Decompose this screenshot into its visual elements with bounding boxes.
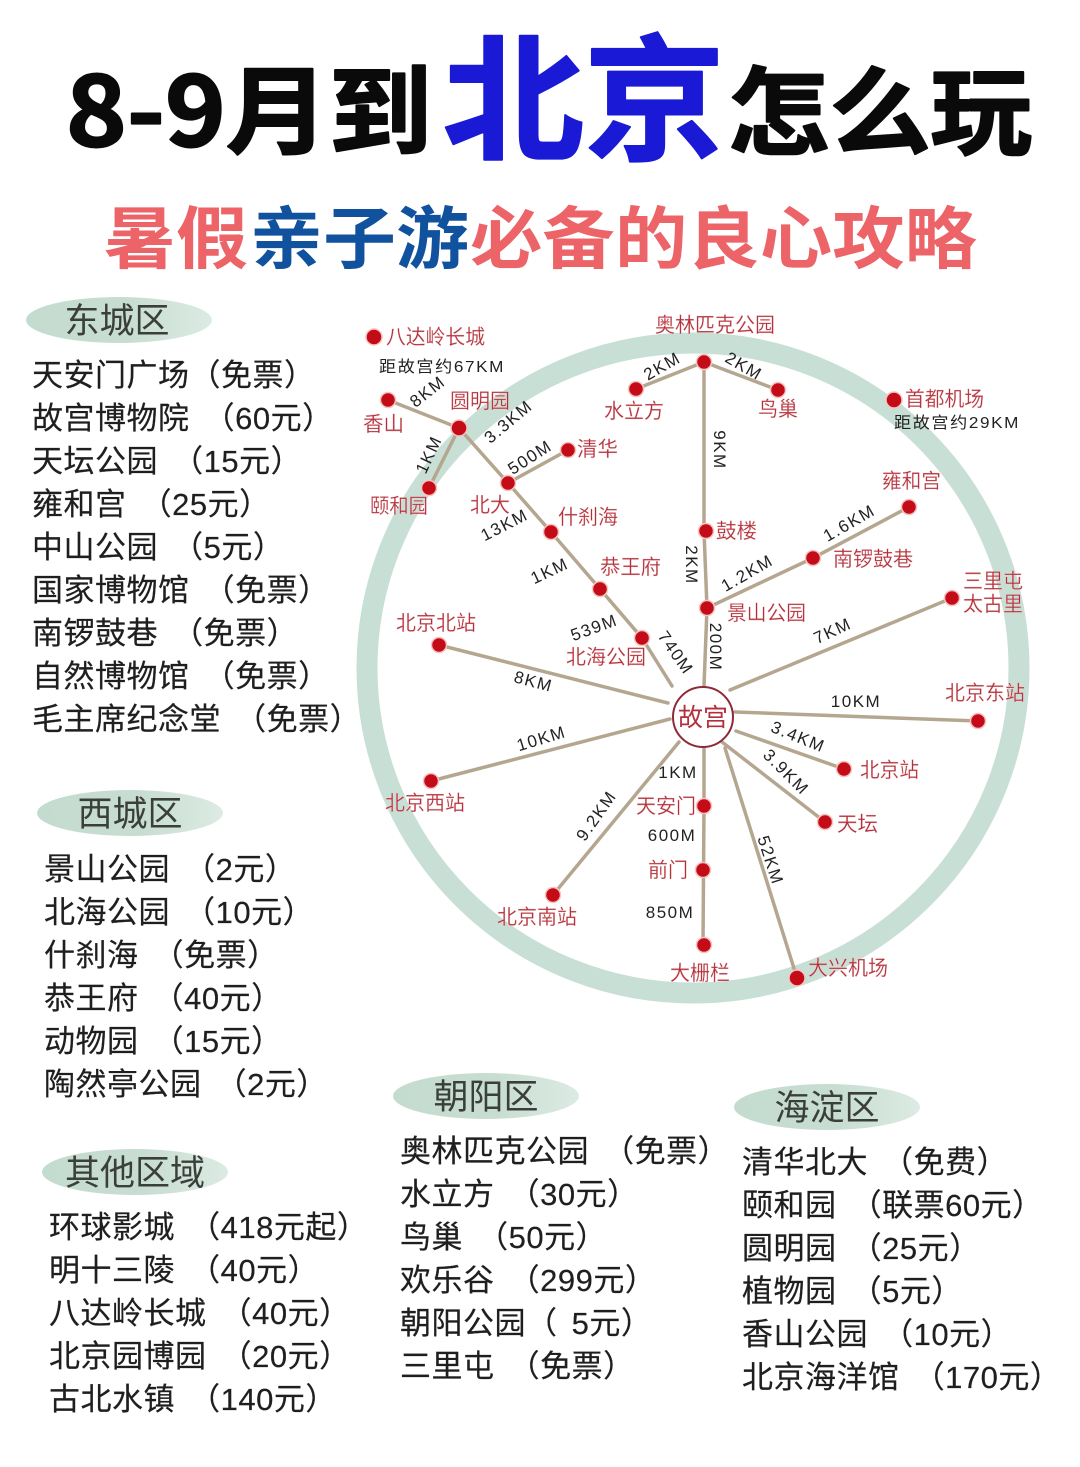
distance labels: 600M: [648, 826, 696, 845]
heading: 其他区域: [42, 1149, 228, 1195]
panel: 朝阳区: [393, 1073, 729, 1384]
node: 北京南站: 北京南站: [497, 906, 577, 929]
heading: 其他区域: 其他区域: [65, 1154, 205, 1193]
list: 朝阳区 attractions: 奥林匹克公园 （免票）: [400, 1134, 729, 1169]
list: 东城区 attractions: 南锣鼓巷 （免票）: [32, 616, 298, 651]
list: 海淀区 attractions: [742, 1145, 1061, 1395]
node: 首都机场: 距故宫约29KM: [894, 414, 1020, 432]
title: 8-9月到: [66, 35, 432, 174]
distance labels: 7KM: [811, 614, 855, 648]
node: 景山公园: 景山公园: [727, 602, 806, 625]
heading: 西城区: 西城区: [77, 795, 183, 834]
heading: 海淀区: [734, 1084, 920, 1130]
list: 朝阳区 attractions: [400, 1134, 729, 1384]
distance labels: 9KM: [710, 430, 729, 470]
subtitle: 暑假: [104, 184, 248, 283]
list: 东城区 attractions: 天安门广场（免票）: [32, 358, 316, 393]
heading: 东城区: 东城区: [64, 302, 170, 341]
distance labels: 2KM: [682, 545, 701, 585]
panel: 其他区域: [42, 1149, 368, 1417]
node: 大兴机场: [789, 957, 888, 986]
node: 北京东站: 北京东站: [945, 682, 1025, 705]
list: 东城区 attractions: 天坛公园 （15元）: [32, 444, 302, 479]
node: 圆明园: 圆明园: [450, 390, 510, 413]
node: 鸟巢: 鸟巢: [758, 398, 798, 421]
list: 海淀区 attractions: 北京海洋馆 （170元）: [742, 1360, 1061, 1395]
node: 奥林匹克公园: [655, 314, 775, 370]
node: 景山公园: [700, 600, 806, 625]
subtitle: 亲子游: [250, 184, 469, 283]
node: 香山: 香山: [363, 413, 404, 436]
list: 西城区 attractions: 恭王府 （40元）: [44, 981, 283, 1016]
node: 北海公园: 北海公园: [566, 646, 646, 669]
ring: [367, 343, 1019, 993]
node: 北京东站: [945, 682, 1025, 728]
distance labels: 10KM: [515, 722, 568, 755]
subtitle: 必备的良心攻略: [470, 184, 977, 283]
distance labels: 2KM: [640, 348, 684, 384]
node: 恭王府: [592, 556, 661, 596]
panel: 海淀区: [734, 1084, 1061, 1395]
node: 三里屯太古里: 太古里: [963, 593, 1023, 616]
heading: 朝阳区: [393, 1073, 579, 1119]
subtitle: [104, 184, 977, 283]
distance labels: 1.6KM: [820, 501, 879, 546]
node: 北大: [470, 476, 516, 517]
panel: 西城区: [37, 790, 328, 1102]
node: 大栅栏: 大栅栏: [670, 962, 730, 985]
list: 其他区域 attractions: 八达岭长城 （40元）: [49, 1296, 351, 1331]
connecting lines: [388, 362, 978, 978]
node: 雍和宫: [882, 470, 941, 514]
list: 其他区域 attractions: [49, 1210, 368, 1417]
node: 颐和园: 颐和园: [370, 495, 428, 518]
radial map of Beijing attractions around 故宫: [363, 314, 1025, 993]
list: 朝阳区 attractions: 朝阳公园（ 5元）: [400, 1306, 652, 1341]
list: 海淀区 attractions: 植物园 （5元）: [742, 1274, 963, 1309]
list: 其他区域 attractions: 北京园博园 （20元）: [49, 1339, 351, 1374]
node: 雍和宫: 雍和宫: [882, 470, 941, 493]
title: [66, 0, 1032, 189]
list: 西城区 attractions: [44, 852, 328, 1102]
distance labels: 740M: [654, 628, 697, 678]
list: 朝阳区 attractions: 鸟巢 （50元）: [400, 1220, 607, 1255]
node: 什刹海: [544, 506, 618, 540]
distance labels: [406, 348, 881, 922]
list: 东城区 attractions: 国家博物馆 （免票）: [32, 573, 330, 608]
distance labels: 200M: [706, 623, 725, 671]
list: 海淀区 attractions: 圆明园 （25元）: [742, 1231, 981, 1266]
list: 朝阳区 attractions: 三里屯 （免票）: [400, 1349, 635, 1384]
distance labels: 1KM: [528, 554, 572, 588]
distance labels: 3.4KM: [768, 717, 828, 756]
node: 天坛: [818, 813, 878, 836]
node: 香山: [363, 392, 404, 436]
node: 南锣鼓巷: 南锣鼓巷: [833, 548, 913, 571]
list: 东城区 attractions: [32, 358, 361, 737]
list: 其他区域 attractions: 环球影城 （418元起）: [49, 1210, 368, 1245]
node: 三里屯太古里: 三里屯: [963, 570, 1023, 593]
node: 北京南站: [497, 888, 577, 929]
node: 大栅栏: [670, 938, 730, 985]
node: 天坛: 天坛: [837, 813, 878, 836]
heading: 朝阳区: 朝阳区: [433, 1078, 539, 1117]
node: 圆明园: [450, 390, 510, 436]
node: 北京北站: [396, 612, 476, 652]
heading: 东城区: [26, 297, 212, 343]
node: 北京北站: 北京北站: [396, 612, 476, 635]
distance labels: 13KM: [478, 505, 531, 545]
list: 东城区 attractions: 雍和宫 （25元）: [32, 487, 271, 522]
node: 颐和园: [370, 480, 436, 518]
node: 鸟巢: [758, 382, 798, 421]
node: 北京西站: [385, 774, 465, 815]
list: 西城区 attractions: 什刹海 （免票）: [44, 938, 279, 973]
distance labels: 1KM: [412, 433, 446, 477]
list: 西城区 attractions: 动物园 （15元）: [44, 1024, 283, 1059]
node: 北大: 北大: [470, 494, 510, 517]
list: 西城区 attractions: 陶然亭公园 （2元）: [44, 1067, 328, 1102]
distance labels: 539M: [568, 611, 620, 645]
node: 大兴机场: 大兴机场: [808, 957, 888, 980]
node: 鼓楼: 鼓楼: [716, 520, 757, 543]
node: 清华: 清华: [577, 438, 618, 461]
list: 东城区 attractions: 自然博物馆 （免票）: [32, 659, 330, 694]
distance labels: 3.9KM: [759, 745, 813, 799]
node: 水立方: [604, 382, 664, 423]
node: 北海公园: [566, 630, 650, 669]
distance labels: 8KM: [512, 667, 555, 696]
heading: 西城区: [37, 790, 223, 836]
center: 故宫: 故宫: [678, 704, 728, 732]
node: 恭王府: 恭王府: [600, 556, 661, 579]
node: 八达岭长城: 八达岭长城: [386, 326, 485, 349]
node: 八达岭长城: 距故宫约67KM: [379, 358, 505, 376]
node: 天安门: 天安门: [636, 795, 696, 818]
panel: 东城区: [26, 297, 361, 737]
distance labels: 1.2KM: [718, 551, 777, 596]
title: 怎么玩: [728, 36, 1032, 175]
node: 北京西站: 北京西站: [385, 792, 465, 815]
list: 其他区域 attractions: 古北水镇 （140元）: [49, 1382, 337, 1417]
list: 朝阳区 attractions: 水立方 （30元）: [400, 1177, 639, 1212]
distance labels: 3.3KM: [481, 396, 536, 447]
node: 前门: 前门: [648, 859, 688, 882]
distance labels: 850M: [646, 903, 694, 922]
distance labels: 52KM: [753, 833, 787, 887]
list: 东城区 attractions: 故宫博物院 （60元）: [32, 401, 334, 436]
heading: 海淀区: 海淀区: [774, 1089, 880, 1128]
list: 东城区 attractions: 毛主席纪念堂 （免票）: [32, 702, 361, 737]
distance labels: 500M: [504, 436, 556, 479]
list: 海淀区 attractions: 清华北大 （免费）: [742, 1145, 1008, 1180]
node: 奥林匹克公园: 奥林匹克公园: [655, 314, 775, 337]
list: 西城区 attractions: 北海公园 （10元）: [44, 895, 314, 930]
list: 海淀区 attractions: 香山公园 （10元）: [742, 1317, 1012, 1352]
distance labels: 9.2KM: [572, 787, 621, 844]
node: 首都机场: [886, 388, 1020, 432]
list: 其他区域 attractions: 明十三陵 （40元）: [49, 1253, 319, 1288]
node: 八达岭长城: [366, 326, 505, 376]
distance labels: 2KM: [722, 348, 766, 384]
node: 什刹海: 什刹海: [558, 506, 618, 529]
list: 海淀区 attractions: 颐和园 （联票60元）: [742, 1188, 1044, 1223]
distance labels: 10KM: [831, 692, 881, 711]
list: 东城区 attractions: 中山公园 （5元）: [32, 530, 284, 565]
node: 北京站: 北京站: [860, 759, 919, 782]
center: 故宫: [673, 687, 733, 747]
list: 西城区 attractions: 景山公园 （2元）: [44, 852, 296, 887]
node: 北京站: [836, 759, 919, 782]
node: 首都机场: 首都机场: [905, 388, 984, 411]
distance labels: 1KM: [658, 763, 698, 782]
list: 朝阳区 attractions: 欢乐谷 （299元）: [400, 1263, 656, 1298]
node: 水立方: 水立方: [604, 400, 664, 423]
distance labels: 8KM: [406, 372, 449, 411]
node: 三里屯太古里: [944, 570, 1023, 616]
node: 前门: [648, 859, 710, 882]
